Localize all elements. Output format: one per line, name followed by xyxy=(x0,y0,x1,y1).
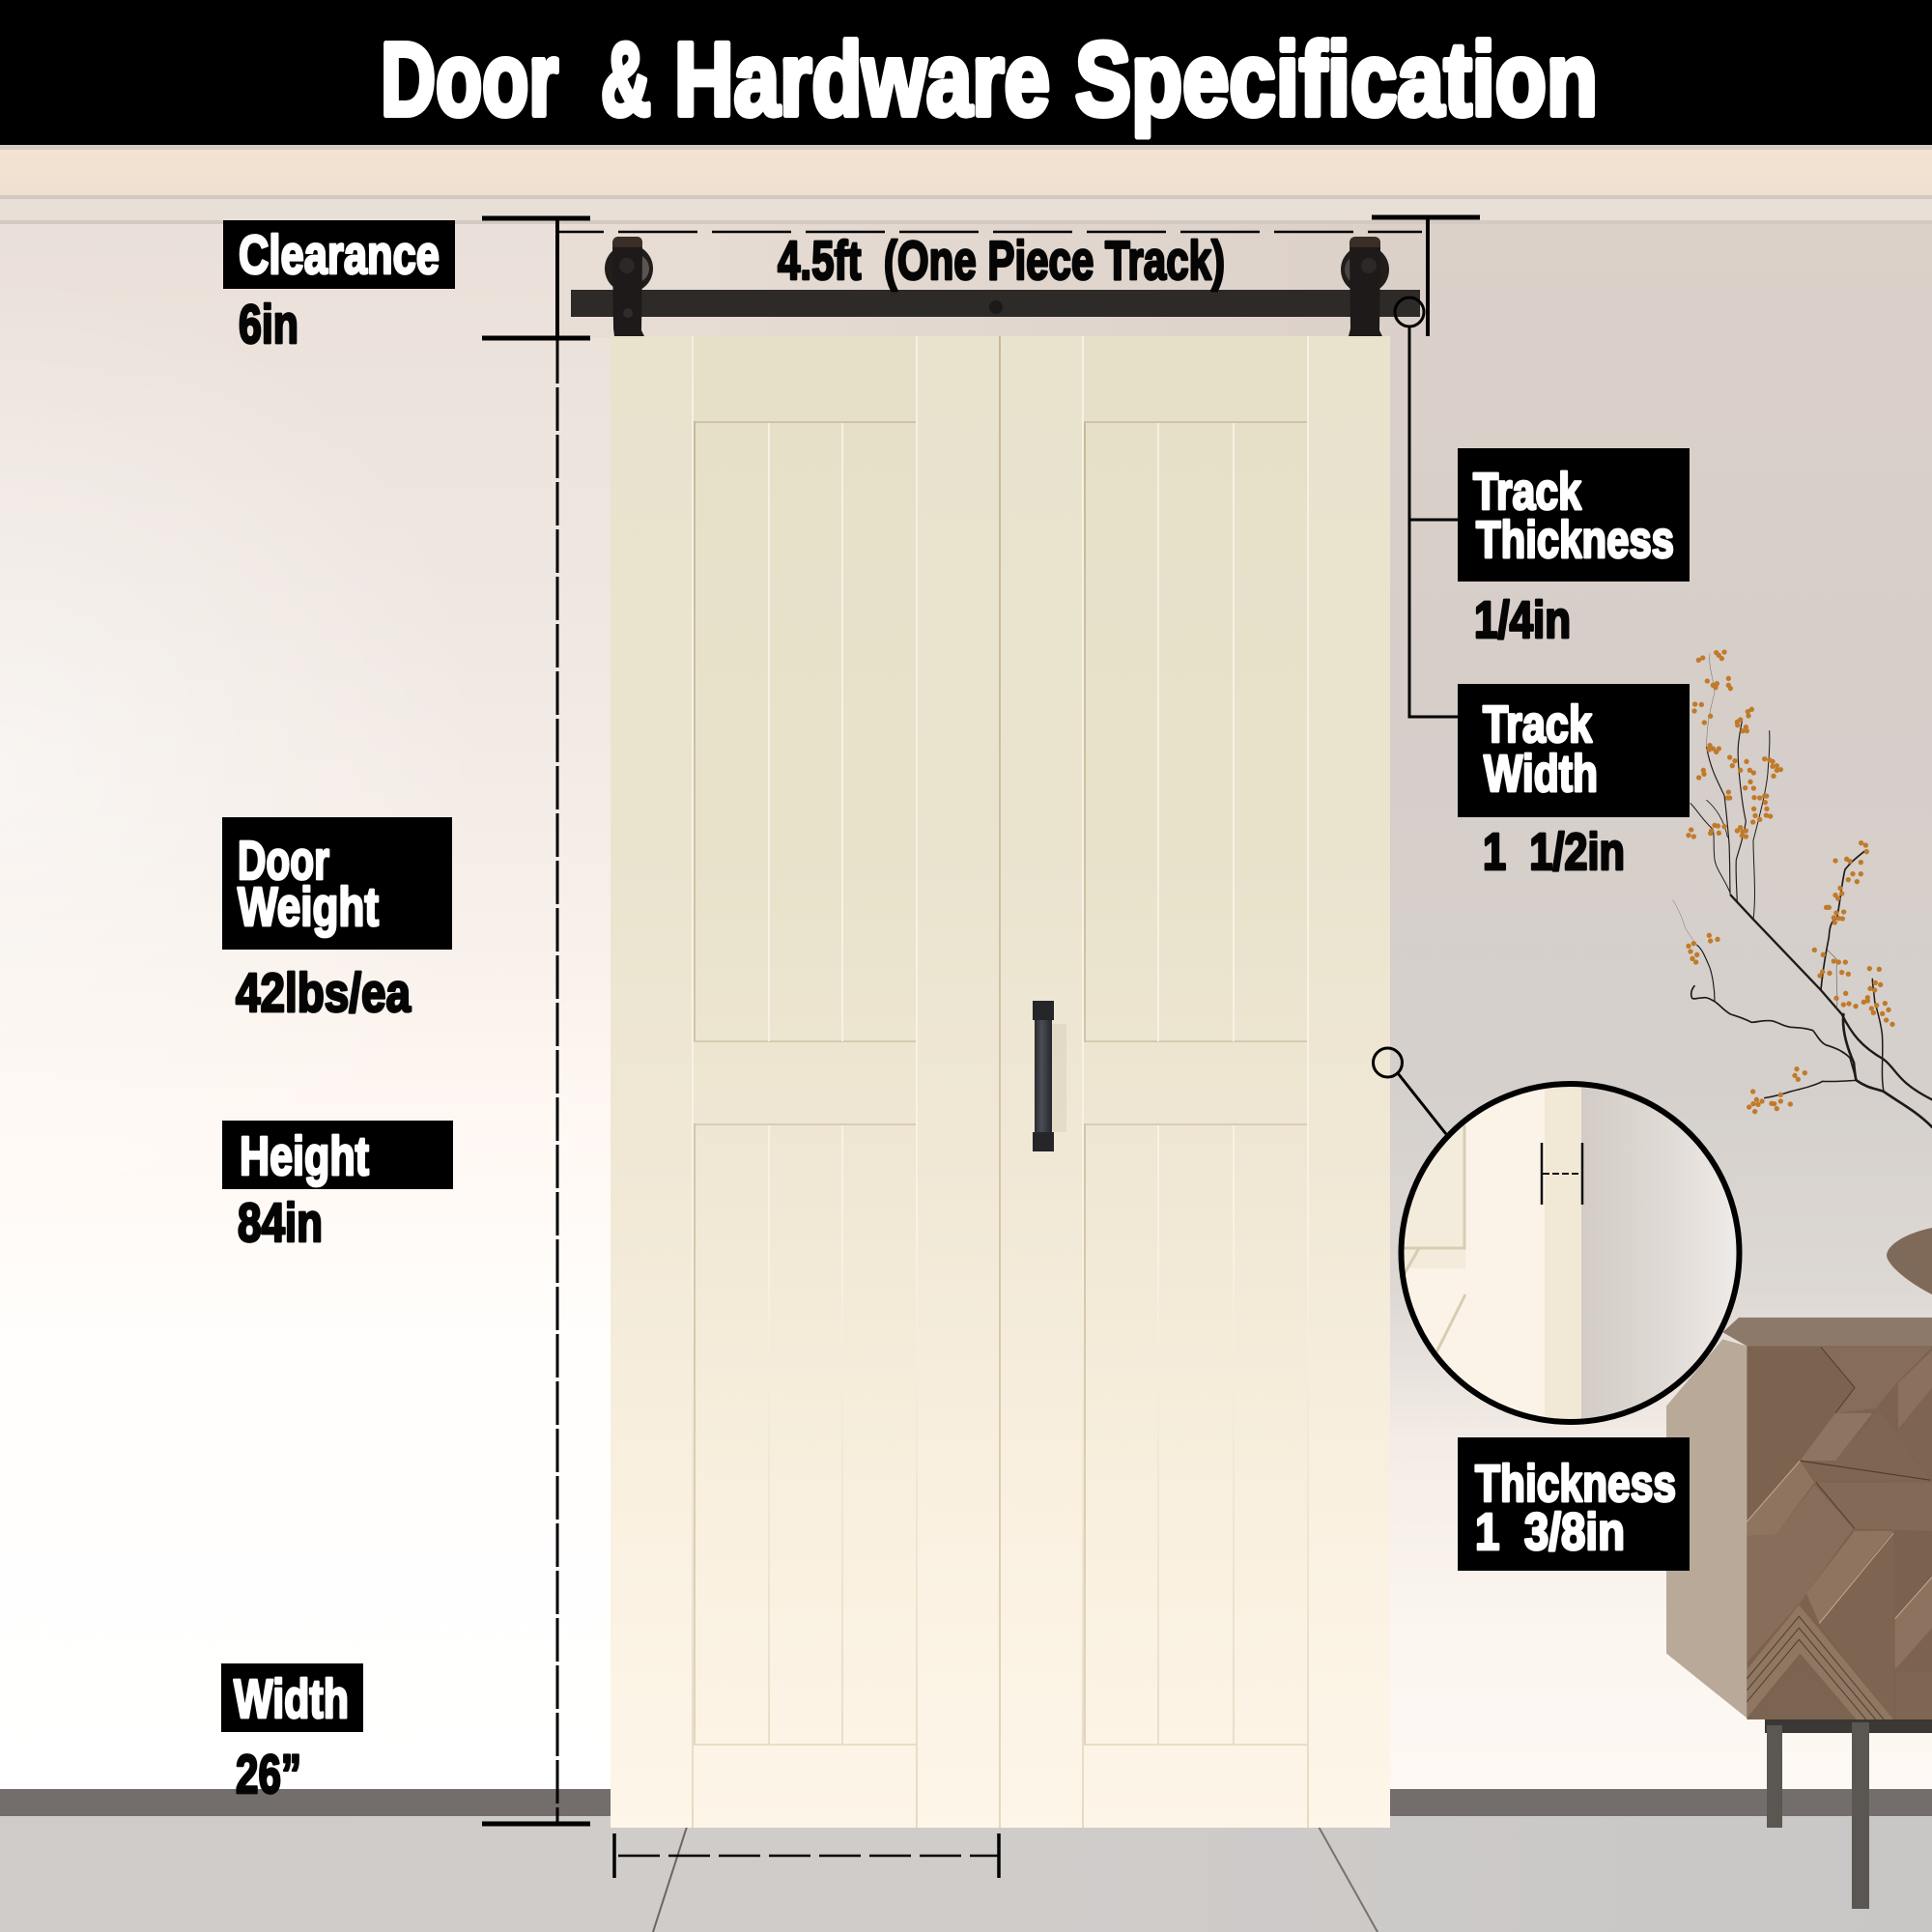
left hanger xyxy=(605,237,653,336)
label: height: Height xyxy=(240,1125,369,1187)
label: track width: 1 1/2in xyxy=(1483,823,1625,881)
track right end tick xyxy=(1372,217,1480,336)
title banner xyxy=(0,0,1932,145)
label: track width: Width xyxy=(1484,745,1598,803)
label: track thickness: 1/4in xyxy=(1474,591,1571,649)
label: door weight: Weight xyxy=(238,876,379,938)
magnified thickness mark xyxy=(1542,1143,1582,1205)
clearance dimension xyxy=(482,218,590,340)
door handle xyxy=(1033,1001,1066,1151)
baseboard and floor xyxy=(0,1789,1932,1932)
label: track thickness xyxy=(1458,448,1690,649)
left door panels xyxy=(693,336,917,1828)
cabinet legs and frame xyxy=(1765,1719,1932,1909)
label: track thickness: Thickness xyxy=(1476,511,1674,569)
track bar xyxy=(571,290,1420,317)
label: width: 26” xyxy=(236,1744,301,1805)
label: door thickness: 1 3/8in xyxy=(1475,1503,1625,1561)
bowl on cabinet xyxy=(1887,1228,1932,1294)
label: door weight: Door xyxy=(238,830,329,892)
dimension lines xyxy=(482,217,1480,1878)
track callout connector xyxy=(1395,298,1458,717)
right door panels xyxy=(1083,336,1308,1828)
label: clearance: 6in xyxy=(239,294,298,355)
label: door weight xyxy=(222,817,452,1024)
width dashed dimension xyxy=(614,1833,999,1878)
track centre bolt xyxy=(989,300,1003,314)
barn door pair xyxy=(611,336,1390,1828)
track length dashed line xyxy=(557,231,1422,233)
sliding track and hangers xyxy=(571,237,1420,336)
centre seam xyxy=(999,336,1001,1828)
label: track thickness: Track xyxy=(1473,463,1582,521)
label: door weight: 42lbs/ea xyxy=(236,962,412,1024)
label: height xyxy=(222,1121,453,1254)
label: door thickness xyxy=(1458,1437,1690,1571)
title text: & xyxy=(601,20,651,137)
door slabs xyxy=(611,336,1390,1828)
label: track width: Track xyxy=(1483,696,1593,753)
title text xyxy=(381,20,1598,137)
magnifier ring xyxy=(1401,1084,1739,1422)
label: width xyxy=(221,1663,363,1805)
label: door thickness: Thickness xyxy=(1475,1455,1676,1513)
right hanger xyxy=(1341,237,1389,336)
label: height: 84in xyxy=(238,1192,323,1254)
decorative branch with orange berries xyxy=(1673,649,1932,1127)
magnifier pointer xyxy=(1374,1048,1446,1134)
wooden cabinet with geometric front and bowl xyxy=(1666,1228,1932,1909)
door height lower tick xyxy=(482,1822,590,1826)
track length label: 4.5ft (One Piece Track) xyxy=(778,230,1225,292)
title text: Hardware xyxy=(674,20,1050,137)
label: width: Width xyxy=(234,1668,349,1730)
cabinet body facets xyxy=(1666,1318,1932,1719)
label: clearance: Clearance xyxy=(239,224,440,286)
door height dashed line xyxy=(556,340,558,1824)
thickness magnifier xyxy=(1374,1048,1742,1423)
title text: Door xyxy=(381,20,558,137)
title text: Specification xyxy=(1075,20,1598,137)
label: track width xyxy=(1458,684,1690,881)
label: clearance xyxy=(223,220,455,355)
magnified door edge xyxy=(1399,1083,1742,1423)
